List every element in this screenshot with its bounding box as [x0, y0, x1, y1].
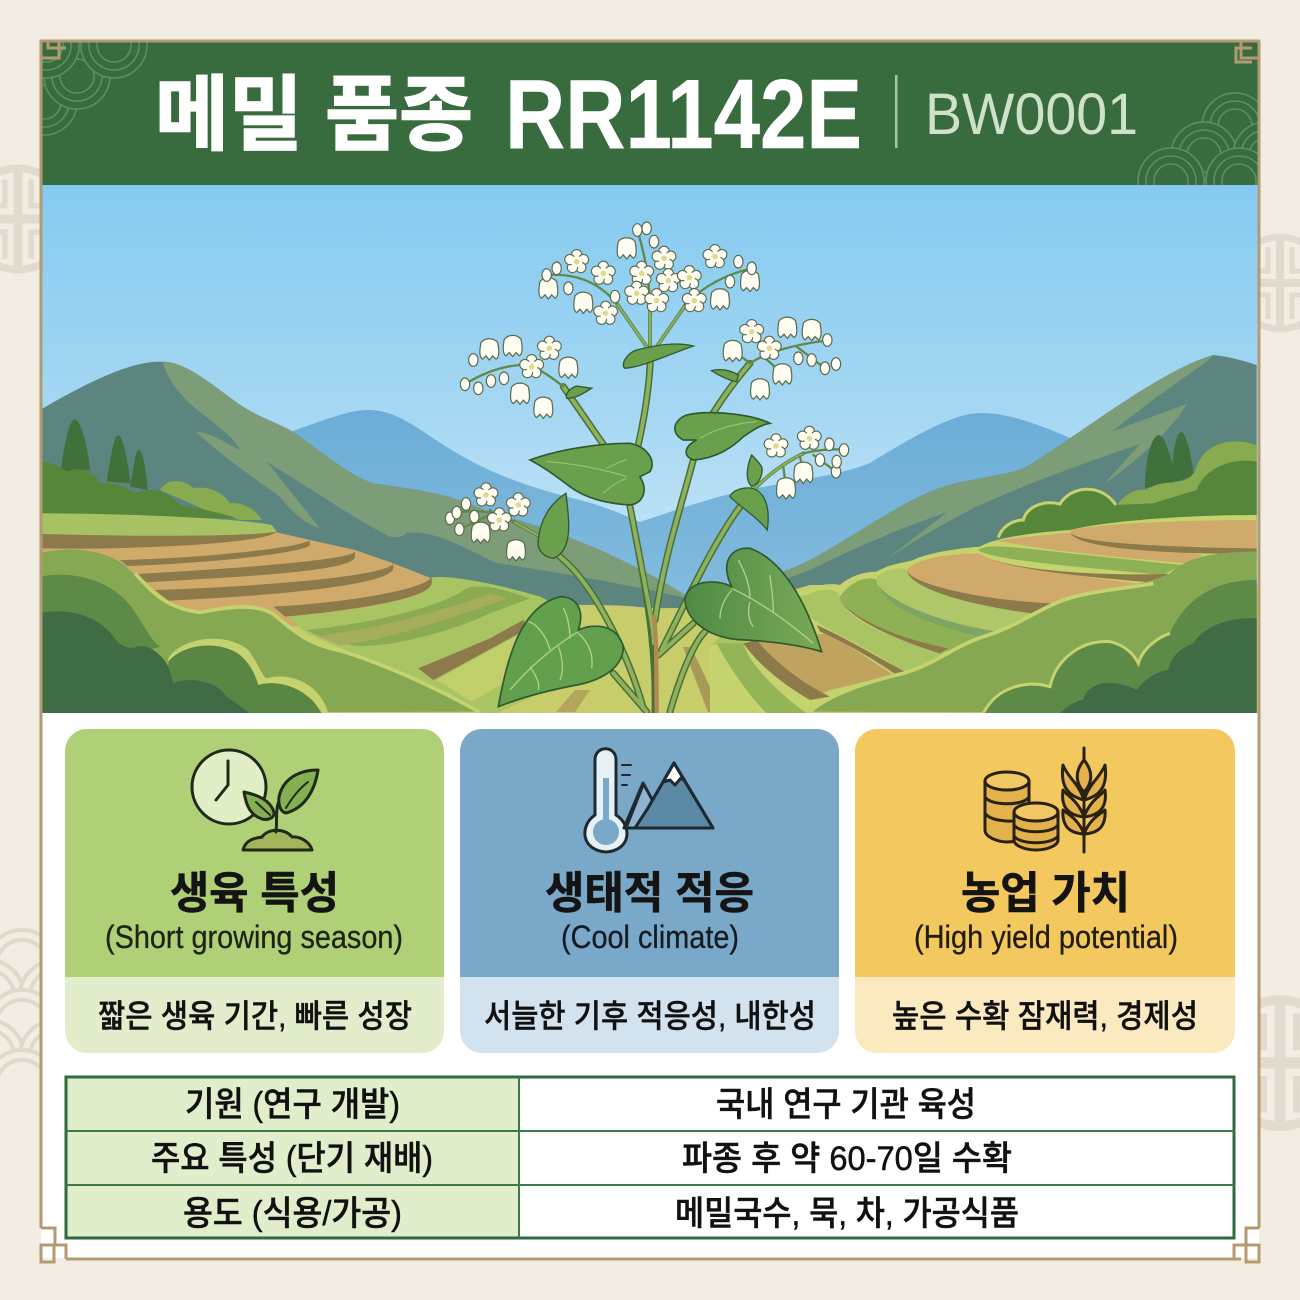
row: origin: 기원 (연구 개발) — [185, 1086, 400, 1124]
foreground bushes — [983, 580, 1257, 713]
stems — [457, 233, 844, 713]
header wave pattern: bottom right — [1137, 92, 1258, 185]
flowers and buds — [445, 222, 849, 561]
row: key traits: 파종 후 약 60-70일 수확 — [682, 1140, 1012, 1178]
right mountain — [783, 355, 1257, 590]
terrace walls — [120, 540, 432, 617]
flower sprigs — [457, 233, 844, 529]
terrace rim — [710, 515, 1257, 713]
subheading: short growing season: (Short growing season) — [105, 919, 403, 955]
trees — [1145, 432, 1194, 488]
left mountain — [42, 362, 685, 608]
panel: growth characteristics — [65, 729, 444, 1053]
title separator — [895, 75, 898, 148]
heading: ecological adaptation: 생태적 적응 — [545, 869, 754, 918]
row: key traits: 주요 특성 (단기 재배) — [151, 1140, 433, 1178]
icon: clock and sprout — [192, 750, 318, 850]
row: uses: 용도 (식용/가공) — [183, 1195, 402, 1233]
tan terraces — [907, 553, 1150, 603]
title — [155, 59, 862, 169]
panel: ecological adaptation — [460, 729, 839, 1053]
header band — [42, 42, 1258, 185]
description: value: 높은 수확 잠재력, 경제성 — [892, 998, 1198, 1034]
variety code: BW0001 — [925, 82, 1138, 147]
right terraces and bushes — [710, 432, 1257, 713]
center field base — [292, 585, 1258, 713]
icon: thermometer and mountains — [585, 749, 713, 852]
upper bushes — [160, 481, 262, 520]
description: adaptation: 서늘한 기후 적응성, 내한성 — [484, 998, 816, 1034]
leaf: bottom left — [498, 597, 623, 707]
header wave pattern: top left — [42, 42, 148, 136]
buckwheat plant — [445, 222, 849, 713]
lower terrace fields — [840, 578, 998, 652]
heading: growth characteristics: 생육 특성 — [170, 869, 339, 918]
leaf: bottom right — [685, 548, 822, 652]
leaf: small bracts — [538, 370, 768, 558]
front green hill — [810, 552, 1257, 713]
blue far mountains — [292, 410, 1070, 595]
data table — [66, 1077, 1234, 1238]
foreground bushes — [42, 574, 160, 649]
top green terrace — [40, 532, 277, 549]
tan terrace base — [40, 532, 432, 627]
row: key traits — [151, 1140, 1012, 1178]
row: uses: 메밀국수, 묵, 차, 가공식품 — [675, 1195, 1019, 1233]
leaf: middle left — [530, 443, 652, 505]
trees — [61, 419, 148, 490]
front green hill — [40, 549, 480, 713]
subheading: cool climate: (Cool climate) — [561, 919, 739, 955]
heading: agricultural value: 농업 가치 — [961, 869, 1130, 918]
left terraces and bushes — [40, 419, 577, 717]
lower left field bands — [287, 577, 560, 717]
title: 메밀 품종 — [155, 70, 473, 161]
center-right field strips — [710, 590, 948, 673]
landscape illustration — [40, 185, 1258, 717]
panel: agricultural value — [855, 729, 1235, 1053]
leaf: top bract — [623, 344, 693, 368]
background lattice and wave motifs — [0, 168, 1300, 1126]
leaf: middle right — [675, 413, 770, 460]
subheading: high yield potential: (High yield potential) — [914, 919, 1178, 955]
title: RR1142E — [505, 59, 862, 169]
icon: coins and wheat — [985, 748, 1106, 852]
row: origin: 국내 연구 기관 육성 — [716, 1086, 976, 1124]
description: growth: 짧은 생육 기간, 빠른 성장 — [98, 998, 412, 1034]
row: uses — [183, 1195, 1019, 1233]
row: origin — [185, 1086, 976, 1124]
upper bushes — [1118, 441, 1257, 517]
